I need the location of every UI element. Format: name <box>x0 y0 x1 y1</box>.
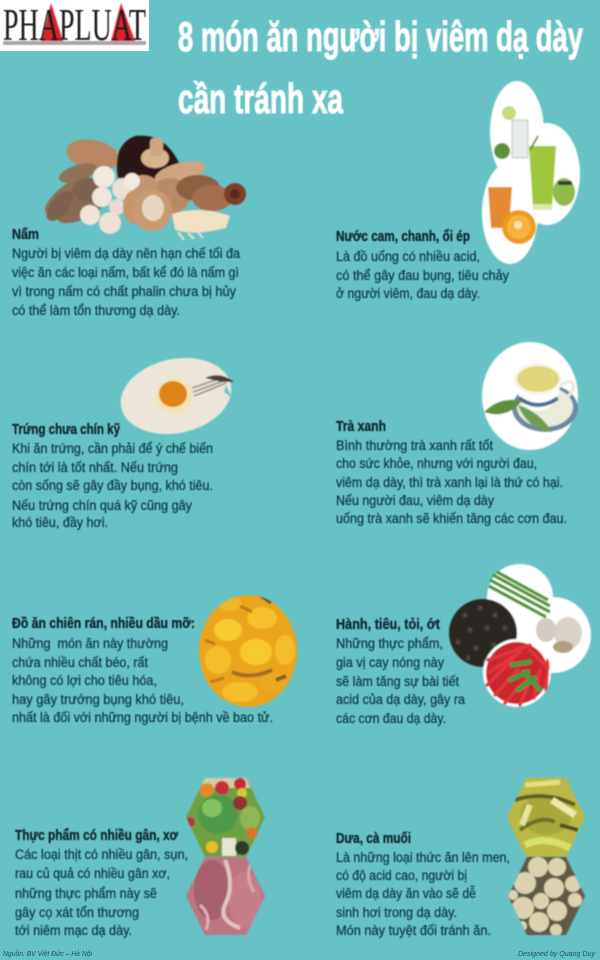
text: Đồ ăn chiên rán, nhiều dầu mỡ: nhất là đối với những người bị bệnh về bao tử. <box>12 710 273 725</box>
text: Nấm <box>12 227 240 318</box>
text: Nấm: Nấm <box>12 227 39 243</box>
text: Thực phẩm có nhiều gân, xơ: Các loại thịt có nhiều gân, sụn, <box>15 847 188 862</box>
text: Nước cam, chanh, ổi ép: Nước cam, chanh, ổi ép <box>336 229 470 245</box>
text: Đồ ăn chiên rán, nhiều dầu mỡ <box>12 616 273 725</box>
text: Nấm: việc ăn các loại nấm, bất kể đó là nấm gì <box>12 265 239 280</box>
text: Hành, tiêu, tỏi, ớt <box>336 617 465 726</box>
text: Trứng chưa chín kỹ <box>12 422 213 530</box>
image: juices <box>482 81 580 264</box>
text: Nước cam, chanh, ổi ép: ở người viêm, đau dạ dày. <box>336 286 480 301</box>
text: Trứng chưa chín kỹ: khó tiêu, đầy hơi. <box>12 515 108 530</box>
text: Trứng chưa chín kỹ: còn sống sẽ gây đầy bụng, khó tiêu. <box>12 478 213 493</box>
text: Dưa, cà muối: có độ acid cao, người bị <box>336 868 467 883</box>
text: Nước cam, chanh, ổi ép: Là đồ uống có nhiều acid, <box>336 249 480 264</box>
image: pickled vegetables hexagon <box>507 778 585 857</box>
text: Nấm: Người bị viêm dạ dày nên hạn chế tối đa <box>12 246 240 261</box>
text: Thực phẩm có nhiều gân, xơ: gây cọ xát tổn thương <box>15 905 139 920</box>
text: Thực phẩm có nhiều gân, xơ: những thực phẩm này sẽ <box>15 886 157 901</box>
image: green tea <box>482 342 578 450</box>
text: Trứng chưa chín kỹ: Nếu trứng chín quá kỹ cũng gây <box>12 498 192 513</box>
title <box>178 13 583 122</box>
image: mushrooms <box>40 135 246 240</box>
text: Thực phẩm có nhiều gân, xơ <box>15 828 188 938</box>
text: Trà xanh: Trà xanh <box>336 419 386 435</box>
logo: Pháp Luật <box>0 0 149 51</box>
text: Đồ ăn chiên rán, nhiều dầu mỡ: không có lợi cho tiêu hóa, <box>12 673 157 688</box>
text: Nấm: vì trong nấm có chất phalin chưa bị hủy <box>12 284 236 299</box>
text: Thực phẩm có nhiều gân, xơ: tới niêm mạc dạ dày. <box>15 923 132 938</box>
source credit: Nguồn: BV Việt Đức – Hà Nội <box>3 949 92 958</box>
text: Hành, tiêu, tỏi, ớt: acid của dạ dày, gây ra <box>336 692 465 707</box>
text: Hành, tiêu, tỏi, ớt: Hành, tiêu, tỏi, ớt <box>336 617 440 633</box>
text: Hành, tiêu, tỏi, ớt: gia vị cay nóng này <box>336 655 444 670</box>
image: vegetables hexagon <box>185 778 265 857</box>
text: Nước cam, chanh, ổi ép: có thể gây đau bụng, tiêu chảy <box>336 268 509 283</box>
text: Trà xanh <box>336 419 567 526</box>
text: Dưa, cà muối: sinh hơi trong dạ dày. <box>336 905 457 920</box>
text: Dưa, cà muối <box>336 831 510 938</box>
image: pickled eggplants hexagon <box>508 857 585 936</box>
image: meat hexagon <box>186 857 265 935</box>
text: Trà xanh: cho sức khỏe, nhưng với người đau, <box>336 456 537 471</box>
text: Dưa, cà muối: viêm dạ dày ăn vào sẽ dễ <box>336 886 476 901</box>
text: Trà xanh: viêm dạ dày, thì trà xanh lại là thứ có hại. <box>336 475 563 490</box>
text: Trà xanh: Nếu người đau, viêm dạ dày <box>336 493 494 508</box>
text: Hành, tiêu, tỏi, ớt: các cơn đau dạ dày. <box>336 711 446 726</box>
text: Nước cam, chanh, ổi ép <box>336 229 509 301</box>
text: Đồ ăn chiên rán, nhiều dầu mỡ: chứa nhiều chất béo, rất <box>12 655 148 670</box>
text: Đồ ăn chiên rán, nhiều dầu mỡ: Những món ăn này thường <box>12 636 168 651</box>
text: Hành, tiêu, tỏi, ớt: Những thực phẩm, <box>336 636 443 651</box>
text: Thực phẩm có nhiều gân, xơ: rau củ quả có nhiều gân xơ, <box>15 866 170 881</box>
designer credit: Designed by Quang Duy <box>518 949 596 958</box>
text: Dưa, cà muối: Dưa, cà muối <box>336 831 411 847</box>
text: Trứng chưa chín kỹ: chín tới là tốt nhất. Nếu trứng <box>12 460 178 475</box>
text: Hành, tiêu, tỏi, ớt: sẽ làm tăng sự bài tiết <box>336 674 459 689</box>
text: Trà xanh: Bình thường trà xanh rất tốt <box>336 438 493 453</box>
text: Trà xanh: uống trà xanh sẽ khiến tăng các cơn đau. <box>336 511 567 526</box>
image: fried food <box>199 595 297 707</box>
text: Nấm: có thể làm tổn thương dạ dày. <box>12 303 180 318</box>
text: Đồ ăn chiên rán, nhiều dầu mỡ: hay gây trướng bụng khó tiêu, <box>12 692 184 707</box>
title: cần tránh xa <box>178 75 343 122</box>
text: Dưa, cà muối: Là những loại thức ăn lên men, <box>336 850 510 865</box>
image: onion, pepper, garlic, chili <box>449 564 591 707</box>
text: Dưa, cà muối: Món này tuyệt đối tránh ăn. <box>336 923 491 938</box>
text: Trứng chưa chín kỹ: Trứng chưa chín kỹ <box>12 422 120 438</box>
text: Trứng chưa chín kỹ: Khi ăn trứng, cần phải để ý chế biến <box>12 441 213 456</box>
text: Thực phẩm có nhiều gân, xơ: Thực phẩm có nhiều gân, xơ <box>15 828 179 844</box>
text: Đồ ăn chiên rán, nhiều dầu mỡ: Đồ ăn chiên rán, nhiều dầu mỡ: <box>12 616 195 632</box>
logo: Pháp Luật: PHAPLUAT <box>3 0 146 50</box>
image: undercooked egg <box>114 348 238 444</box>
